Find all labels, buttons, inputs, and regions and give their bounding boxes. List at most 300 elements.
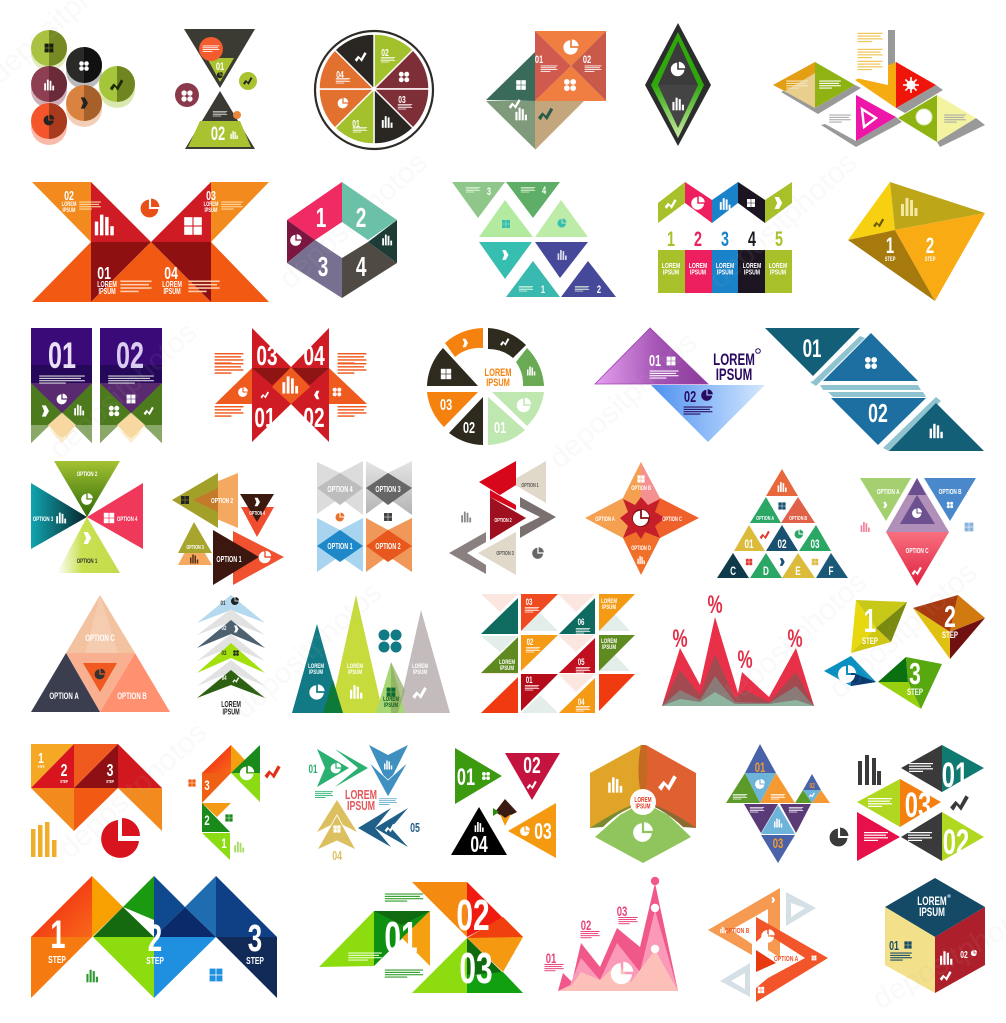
label: OPTION 1 — [77, 558, 97, 565]
number 01: 01 — [97, 264, 111, 284]
number 4: 4 — [542, 183, 547, 196]
number 01: 01 — [942, 757, 968, 795]
icon: bars — [74, 405, 84, 415]
panel: triangle grid with numbers — [481, 594, 635, 713]
icon: check — [950, 795, 969, 811]
icon: pie — [558, 218, 566, 227]
label: OPTION 3 — [496, 550, 514, 556]
number 3: 3 — [318, 251, 328, 283]
number 01: 01 — [803, 335, 822, 363]
panel: circles — [31, 30, 135, 145]
label: IPSUM — [163, 288, 181, 296]
number 01: 01 — [221, 600, 225, 607]
icon: bars — [720, 927, 726, 933]
label: IPSUM — [205, 207, 217, 214]
text lines — [336, 78, 350, 83]
icon: quad — [225, 814, 233, 822]
icon: check — [658, 775, 677, 791]
icon: bars — [350, 685, 362, 699]
heading: IPSUM — [347, 799, 375, 814]
icon: check — [144, 407, 154, 415]
icon: check — [912, 567, 922, 575]
icon: triangle — [862, 109, 876, 127]
text lines — [786, 80, 808, 89]
heading: IPSUM — [222, 709, 240, 717]
icon: bars — [608, 777, 622, 793]
panel: stacked chevrons — [197, 595, 265, 717]
panel: pink area chart — [544, 877, 678, 991]
text lines — [585, 66, 601, 72]
text lines — [944, 114, 966, 123]
panel: 01 02 03 triangles — [319, 882, 523, 993]
icon: bars — [930, 424, 943, 438]
text lines — [188, 280, 220, 292]
icon: pie — [240, 766, 254, 780]
icon: quad — [812, 559, 818, 565]
icon: quad — [441, 369, 451, 379]
label: OPTION B — [117, 691, 147, 701]
number 02: 02 — [116, 334, 144, 376]
text lines — [580, 931, 600, 938]
text lines — [868, 798, 892, 807]
icon: check — [385, 824, 395, 832]
icon: bars — [461, 512, 471, 522]
label: OPTION C — [85, 633, 115, 643]
percent label: % — [737, 646, 753, 674]
icon: quad — [746, 559, 752, 565]
text lines — [379, 798, 397, 805]
icon: bars — [861, 522, 870, 532]
number 02: 02 — [778, 539, 787, 552]
column 2 — [685, 250, 712, 293]
icon: check — [232, 677, 239, 683]
icon: check — [760, 531, 770, 539]
panel: three option triangles — [860, 478, 976, 586]
number 1: 1 — [864, 602, 876, 639]
number 01: 01 — [755, 759, 766, 776]
number 02: 02 — [64, 189, 74, 204]
icon: quad — [667, 357, 675, 365]
number 02: 02 — [943, 824, 969, 862]
icon: dots — [378, 630, 402, 652]
label: STEP — [146, 955, 164, 966]
number 3: 3 — [721, 227, 729, 251]
text lines — [908, 832, 932, 841]
arrow left — [358, 808, 408, 847]
icon: dots — [482, 772, 490, 780]
watermark: depositphotos — [273, 146, 434, 295]
panel: isometric triangles — [773, 29, 985, 147]
icon: bars — [637, 556, 645, 564]
icon: dots — [181, 90, 193, 102]
text lines — [385, 894, 423, 902]
labels: IPSUM — [663, 269, 679, 277]
label: LOREM — [601, 638, 617, 645]
number 01: 01 — [254, 402, 276, 434]
text lines — [733, 794, 747, 799]
percent label: % — [707, 591, 723, 619]
letter F: F — [829, 566, 833, 579]
icon: quad — [184, 217, 202, 235]
icon: pie — [701, 389, 713, 401]
label: STEP — [38, 764, 45, 769]
small star — [493, 799, 517, 826]
letter D: D — [763, 566, 769, 579]
label: LOREM — [308, 663, 324, 670]
icon: pie — [259, 551, 271, 563]
number 3: 3 — [107, 761, 113, 781]
icon: pie — [633, 822, 653, 842]
number 01: 01 — [494, 419, 506, 437]
icon: bars — [95, 215, 114, 235]
number 1: 1 — [886, 233, 894, 258]
text lines — [221, 202, 243, 210]
icon: chevron — [42, 405, 49, 417]
label: LOREM — [601, 598, 617, 605]
label: LOREM — [204, 201, 218, 208]
text lines — [544, 964, 564, 971]
panel: green and orange arrow steps — [188, 745, 281, 860]
heading: LOREM — [221, 701, 241, 709]
icon: bars — [382, 116, 393, 128]
labels: IPSUM — [717, 269, 733, 277]
text lines — [829, 114, 851, 123]
number 01: 01 — [309, 764, 318, 777]
number 03: 03 — [617, 903, 628, 920]
text lines — [684, 406, 712, 415]
labels — [662, 262, 787, 277]
label: IPSUM — [98, 288, 116, 296]
text lines — [857, 33, 883, 70]
panel: four triangles with numbers — [449, 748, 560, 858]
icon: quad — [384, 513, 392, 521]
icon: bars — [901, 198, 918, 216]
number 03: 03 — [526, 597, 532, 607]
text lines — [315, 791, 333, 798]
panel: purple banners — [31, 328, 162, 443]
percent label: % — [672, 625, 688, 653]
icon: chevron — [502, 250, 508, 260]
icon: pie — [611, 962, 633, 984]
icon: chevron — [255, 498, 260, 506]
number 02: 02 — [463, 419, 475, 437]
panel: pastel triangle — [31, 595, 170, 712]
number 04: 04 — [164, 264, 178, 284]
number 03: 03 — [222, 650, 226, 657]
icon: check — [665, 199, 677, 209]
icon: check — [110, 79, 123, 91]
icon: bars — [56, 513, 66, 523]
panel: yellow polyhedron — [848, 182, 985, 301]
text lines — [79, 202, 101, 210]
number 01: 01 — [745, 539, 754, 552]
arrow up — [317, 800, 357, 850]
text lines — [381, 57, 395, 62]
number 2: 2 — [944, 599, 956, 634]
number 01: 01 — [352, 118, 360, 129]
icon: pie — [331, 763, 341, 773]
label: IPSUM — [384, 702, 398, 709]
text lines — [519, 286, 533, 291]
panel: hexagon three parts — [590, 745, 696, 863]
icon: quad — [637, 475, 645, 483]
icon: quad — [188, 779, 196, 787]
icon: quad — [516, 80, 526, 90]
number 02: 02 — [523, 753, 541, 779]
icon: check — [527, 781, 537, 789]
heading: IPSUM — [635, 804, 651, 811]
column 3 — [712, 250, 738, 293]
labels: LOREM — [743, 262, 761, 270]
icon: pie — [238, 387, 248, 397]
letter E: E — [795, 566, 801, 579]
labels: IPSUM — [770, 269, 786, 277]
label: OPTION A — [877, 489, 900, 496]
icon: star — [903, 77, 919, 93]
registered mark — [756, 349, 760, 353]
label: OPTION C — [662, 516, 682, 523]
icon: check — [873, 218, 884, 228]
panel: green and indigo triangles — [452, 182, 616, 297]
label: OPTION 2 — [375, 543, 401, 551]
panel: four bow ties — [317, 461, 412, 572]
label: OPTION D — [631, 545, 651, 552]
icon: quad — [965, 523, 973, 531]
icon: chevron — [775, 197, 782, 209]
icon: chevron — [771, 897, 775, 903]
panel: double arrows — [309, 745, 420, 864]
icon: check — [940, 971, 952, 981]
watermark: depositphotos — [43, 316, 204, 465]
icon: pie — [95, 669, 105, 679]
number 02: 02 — [211, 124, 225, 145]
text lines — [353, 127, 367, 132]
panel: hourglass — [175, 29, 257, 149]
text lines — [466, 187, 480, 192]
icon: dots — [79, 61, 89, 71]
icon: quad — [812, 956, 816, 960]
number 03: 03 — [256, 340, 278, 372]
number 03: 03 — [905, 787, 931, 825]
icon: pie — [517, 398, 531, 412]
label: OPTION 4 — [327, 486, 353, 494]
icon: dots — [947, 502, 953, 508]
number 03: 03 — [811, 539, 820, 552]
number 02: 02 — [583, 52, 591, 65]
label: LOREM — [62, 201, 76, 208]
letter C: C — [730, 566, 737, 579]
number 01: 01 — [535, 52, 543, 65]
icon: bars — [778, 482, 787, 492]
icon: bars — [720, 198, 731, 210]
number 04: 04 — [470, 832, 488, 858]
title: IPSUM — [486, 375, 510, 388]
panel: three steps polygons — [824, 595, 985, 709]
number 1: 1 — [38, 749, 44, 767]
icon: quad — [104, 513, 114, 523]
icon: quad — [778, 502, 786, 510]
icon: check — [243, 77, 252, 85]
number 02: 02 — [809, 783, 815, 790]
number 2: 2 — [148, 917, 162, 959]
icon: pie — [520, 826, 530, 836]
panel: percent area chart — [662, 591, 814, 706]
number 01: 01 — [546, 950, 557, 967]
label: STEP — [907, 687, 923, 697]
icon: chevron — [314, 391, 319, 399]
heading: LOREM — [917, 896, 947, 909]
label: OPTION 3 — [375, 486, 401, 494]
icon: quad — [45, 44, 53, 52]
heading: LOREM — [634, 797, 652, 804]
icon: pie — [338, 98, 348, 108]
number 01: 01 — [216, 59, 224, 72]
number 5: 5 — [775, 227, 783, 251]
label: IPSUM — [500, 665, 514, 672]
icon: bars — [515, 108, 527, 120]
label: LOREM — [499, 659, 515, 666]
number 01: 01 — [384, 912, 418, 961]
label: OPTION A — [774, 955, 799, 963]
label: OPTION 2 — [77, 471, 97, 478]
number 03: 03 — [398, 94, 406, 105]
label: LOREM — [383, 696, 399, 703]
icon: pie — [671, 62, 685, 76]
icon: pie — [290, 234, 302, 246]
icon: pie — [691, 196, 705, 210]
number 2: 2 — [356, 202, 366, 234]
label: OPTION 3 — [33, 516, 53, 523]
labels: LOREM — [689, 262, 707, 270]
label: IPSUM — [602, 604, 616, 611]
label: OPTION B — [789, 515, 808, 521]
label: IPSUM — [348, 669, 362, 676]
number 04: 04 — [332, 849, 343, 864]
icon: pie — [563, 39, 579, 55]
icon: bars — [230, 131, 238, 139]
number 03: 03 — [459, 943, 493, 992]
number 3: 3 — [248, 917, 262, 959]
number 3: 3 — [909, 656, 921, 691]
icon: bars — [774, 818, 782, 828]
labels: IPSUM — [744, 269, 760, 277]
column 5 — [765, 250, 792, 293]
icon: bars — [86, 970, 98, 982]
icon: check — [264, 765, 281, 779]
icon: dots — [399, 72, 409, 82]
icon: chevron — [463, 339, 468, 347]
icon: chevron — [780, 558, 785, 566]
icon: bars — [382, 235, 392, 245]
icon: check — [412, 687, 427, 699]
icon: check — [500, 338, 509, 346]
number 02: 02 — [303, 402, 325, 434]
number 4: 4 — [356, 251, 367, 283]
label: OPTION B — [725, 927, 750, 935]
registered mark — [947, 894, 951, 898]
label: LOREM — [97, 281, 117, 289]
panel: red orange house — [31, 744, 162, 858]
number 03: 03 — [440, 396, 452, 414]
label: OPTION 1 — [521, 482, 539, 488]
panel: arrows 01 02 03 — [857, 745, 984, 862]
labels: LOREM — [769, 262, 787, 270]
number 1: 1 — [316, 202, 326, 234]
text lines — [108, 376, 154, 384]
panel: hexagon ring — [287, 182, 397, 298]
icon: quad — [387, 688, 395, 696]
column 1 — [658, 250, 685, 293]
label: STEP — [48, 954, 66, 965]
icon: bars — [858, 755, 881, 785]
panel: purple and blue triangles — [595, 328, 765, 442]
icon: quad — [747, 199, 755, 207]
label — [525, 607, 590, 711]
number 02: 02 — [684, 388, 696, 406]
label: LOREM — [412, 663, 428, 670]
panel: pie wheel — [315, 31, 433, 149]
label: IPSUM — [309, 669, 323, 676]
icon: bars — [282, 376, 298, 394]
panel: teal triangles — [765, 328, 984, 451]
icon: check — [355, 52, 367, 62]
label: OPTION 1 — [327, 543, 353, 551]
icon: quad — [181, 496, 189, 504]
icon: dots — [865, 357, 877, 369]
label: STEP — [925, 256, 936, 263]
icon: bars — [940, 951, 952, 965]
number 01: 01 — [889, 939, 899, 954]
number 2: 2 — [597, 282, 601, 295]
number 02: 02 — [222, 625, 226, 632]
icon: bars — [558, 250, 567, 260]
icon: dots — [233, 650, 239, 656]
number 2: 2 — [61, 761, 67, 781]
number 02: 02 — [960, 949, 968, 960]
number 01: 01 — [526, 675, 533, 685]
column 4 — [738, 250, 765, 293]
text lines — [575, 286, 589, 291]
icon: bars — [527, 366, 535, 376]
label: IPSUM — [602, 644, 616, 651]
icon: bars — [31, 822, 56, 857]
label: IPSUM — [413, 669, 427, 676]
icon: check — [260, 392, 269, 398]
number 05: 05 — [578, 657, 585, 667]
icon: pie — [761, 929, 775, 943]
icon: pie — [57, 394, 67, 404]
heading: LOREM — [345, 788, 377, 803]
icon: pie — [231, 597, 239, 605]
text lines — [521, 187, 535, 192]
icon: pie — [81, 493, 93, 505]
number 04: 04 — [304, 340, 325, 372]
label: OPTION B — [631, 485, 651, 492]
label: OPTION C — [906, 548, 929, 555]
icon: check — [809, 793, 815, 797]
watermark: depositphotos — [703, 146, 864, 295]
text lines — [864, 832, 888, 841]
number 02: 02 — [868, 399, 888, 428]
label: OPTION 4 — [249, 510, 266, 516]
text lines — [398, 104, 412, 109]
label: OPTION A — [49, 691, 79, 701]
number 01: 01 — [649, 352, 661, 370]
number 4: 4 — [748, 227, 756, 251]
panel: four point star — [585, 462, 699, 575]
number 03: 03 — [206, 189, 216, 204]
number 1: 1 — [50, 913, 66, 957]
